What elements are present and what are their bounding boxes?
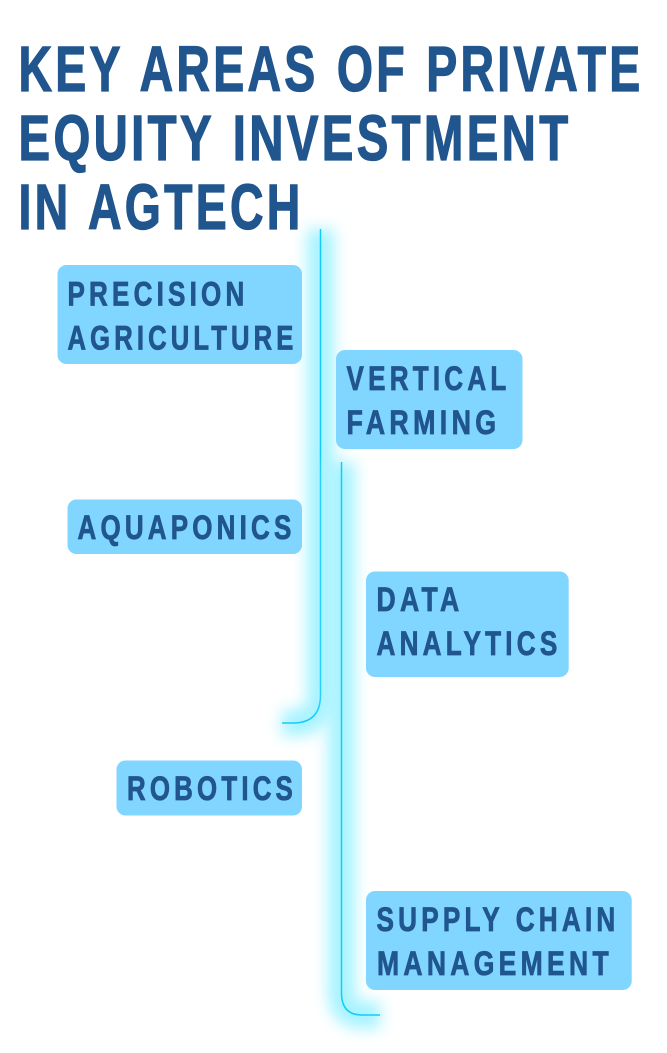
title: IN AGTECH: [18, 171, 304, 243]
panel: data analytics: [366, 572, 569, 677]
panel: aquaponics: AQUAPONICS: [78, 509, 296, 547]
title: [18, 33, 644, 243]
panel: aquaponics: [68, 500, 302, 554]
panel: precision agriculture: AGRICULTURE: [68, 320, 298, 358]
panel: vertical farming: [336, 350, 522, 449]
panel: supply chain management: [366, 891, 632, 990]
panel: precision agriculture: [58, 265, 302, 364]
panel: data analytics: DATA: [376, 581, 464, 619]
panel: vertical farming: FARMING: [346, 404, 500, 442]
panel: robotics: [116, 760, 302, 816]
panel: precision agriculture: PRECISION: [68, 276, 248, 314]
glowing timeline: right branch: [342, 462, 380, 1015]
panel: vertical farming: VERTICAL: [346, 360, 510, 398]
panel: data analytics: ANALYTICS: [376, 625, 562, 663]
panel: robotics: ROBOTICS: [127, 770, 297, 808]
glowing timeline: left branch: [282, 229, 320, 723]
